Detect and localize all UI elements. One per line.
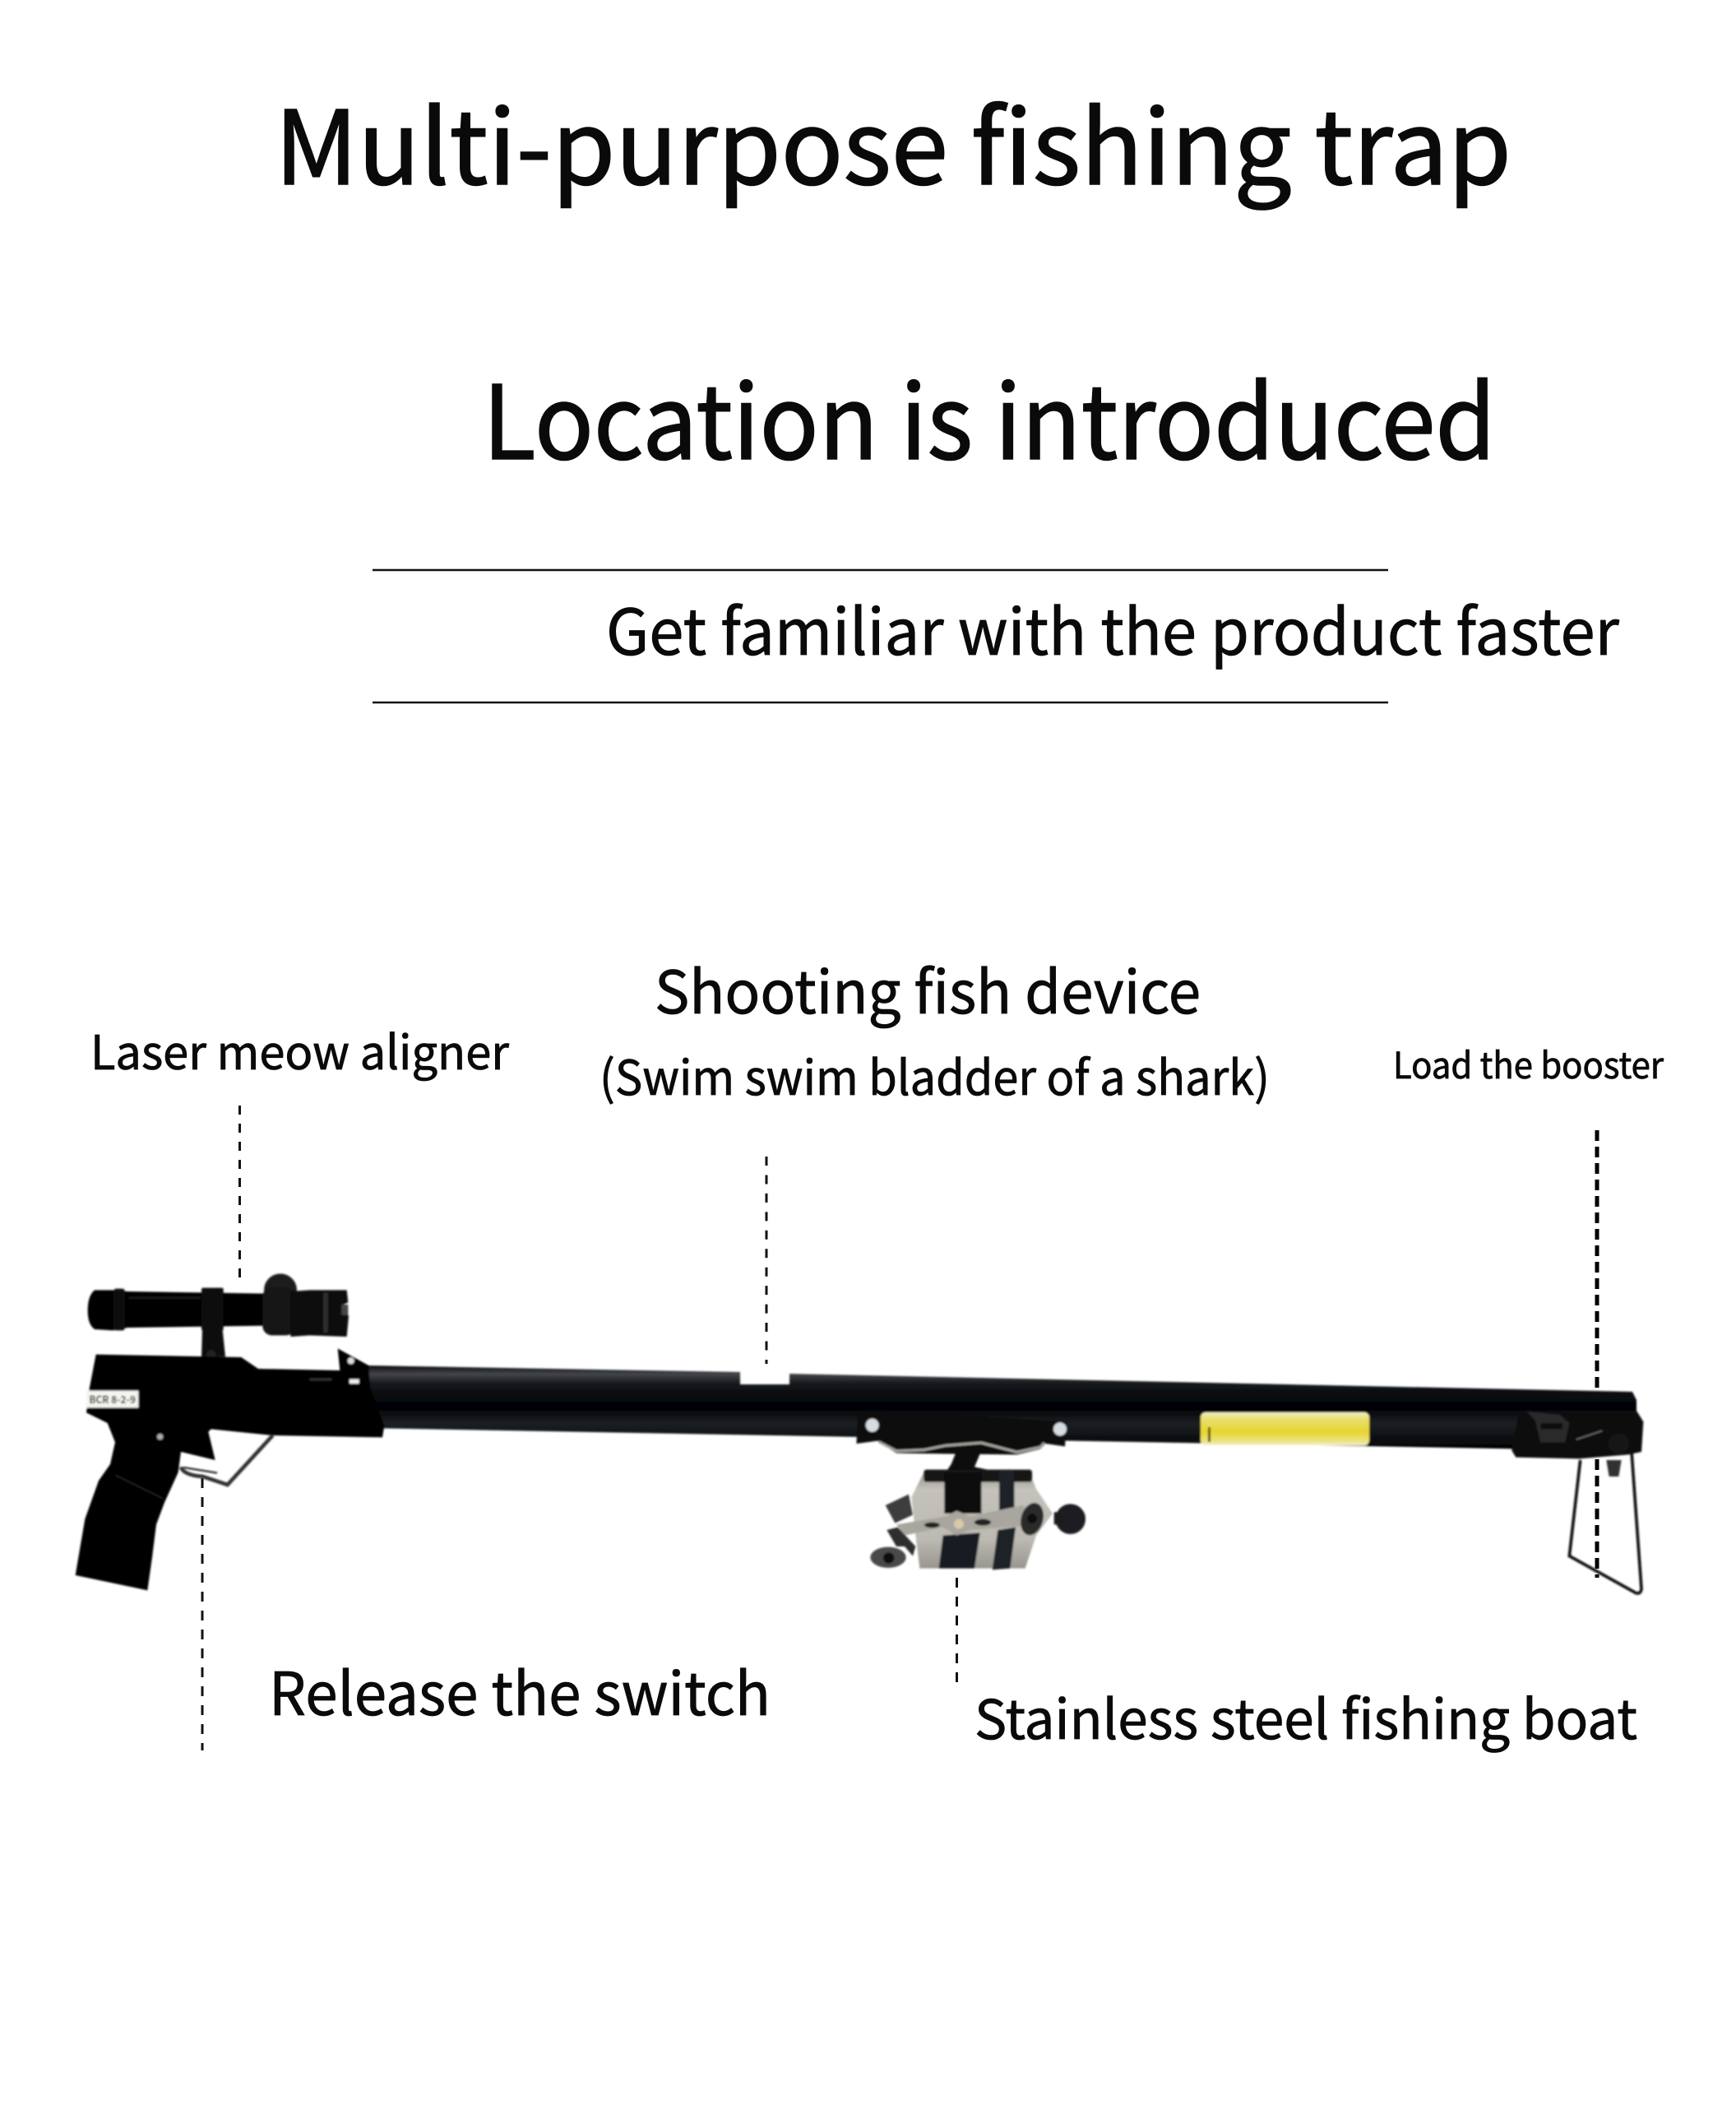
laser scope bbox=[88, 1273, 349, 1359]
screw bbox=[157, 1434, 163, 1440]
label: shooting fish device bbox=[599, 944, 1270, 1109]
leader line: laser aligner bbox=[238, 1106, 241, 1287]
receiver body bbox=[76, 1348, 384, 1590]
reel lever arm bbox=[896, 1505, 1042, 1536]
leader line: fishing boat bbox=[956, 1578, 958, 1682]
yellow label on barrel bbox=[1201, 1412, 1369, 1445]
receiver and grip bbox=[76, 1348, 384, 1590]
handle knobs bbox=[886, 1495, 913, 1523]
trigger guard bbox=[181, 1435, 273, 1485]
barrel bbox=[366, 1365, 1636, 1451]
serial plate bbox=[86, 1391, 138, 1407]
mount plate bbox=[857, 1411, 1067, 1454]
receiver and grip: BCR 8-2-9 bbox=[89, 1391, 136, 1407]
subtitle text: Get familiar with the product faster bbox=[606, 582, 1620, 674]
heading: location is introduced: Location is introduced bbox=[483, 341, 1496, 489]
label: release the switch: Release the switch bbox=[269, 1646, 771, 1732]
leader line: release switch bbox=[201, 1478, 204, 1750]
leader line: shooting device bbox=[765, 1157, 768, 1364]
label: shooting fish device: Shooting fish device bbox=[655, 944, 1201, 1031]
reel and mount bbox=[857, 1411, 1086, 1569]
rear stock mechanism and stand bbox=[1511, 1411, 1643, 1593]
reel drum bbox=[911, 1470, 1053, 1569]
label: laser meow aligner: Laser meow aligner bbox=[90, 1016, 510, 1083]
speargun bbox=[76, 1273, 1643, 1593]
end block bbox=[1511, 1411, 1643, 1458]
label note: swim bladder: (Swim swim bladder of a shark) bbox=[599, 1040, 1270, 1109]
label: stainless steel fishing boat: Stainless steel fishing boat bbox=[974, 1676, 1637, 1755]
title: Multi-purpose fishing trap bbox=[275, 66, 1511, 214]
label: load the booster: Load the booster bbox=[1393, 1036, 1664, 1089]
leader line: booster bbox=[1595, 1130, 1599, 1578]
wire stand bbox=[1569, 1444, 1641, 1593]
